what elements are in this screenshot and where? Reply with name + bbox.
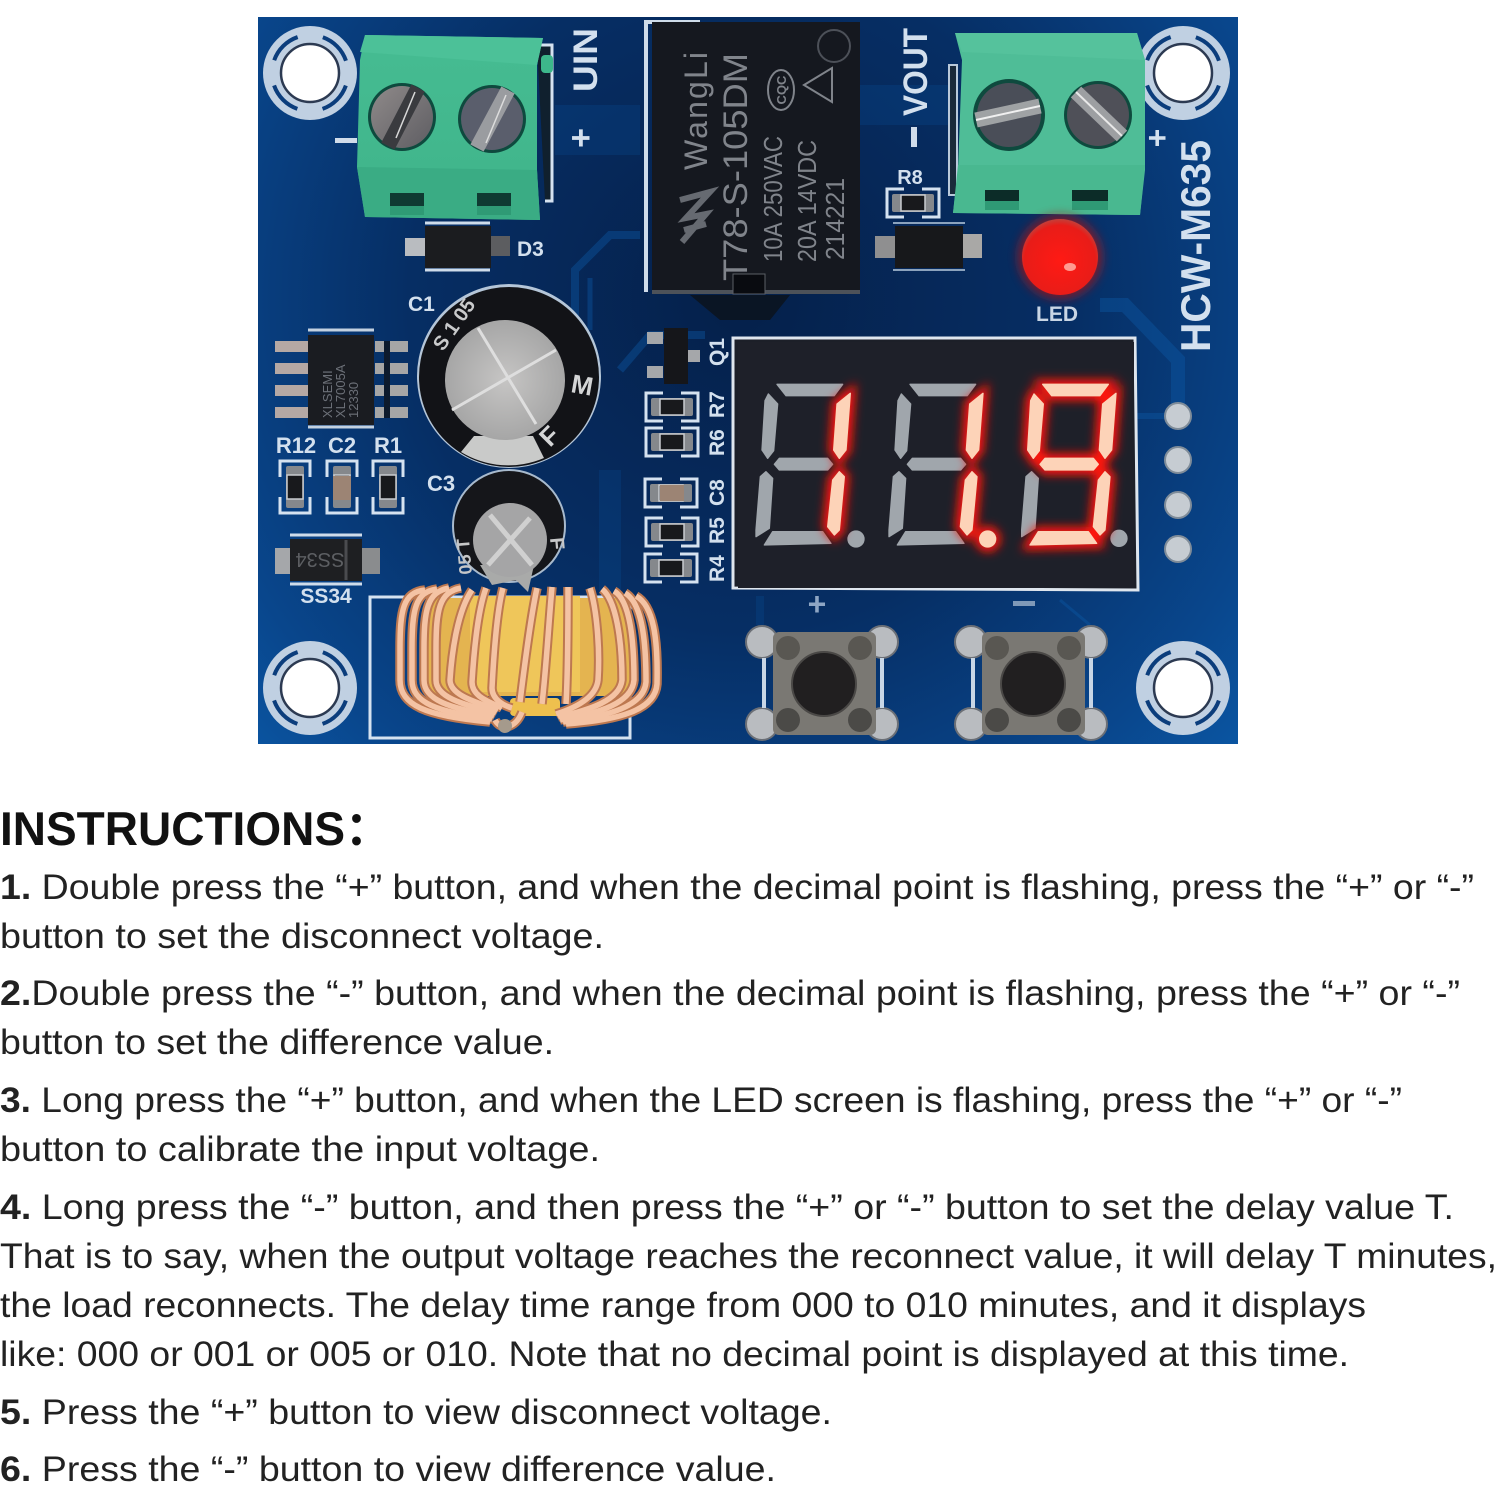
labels: Q1 R7 R6 C8 R5 R4: R5: [706, 517, 729, 544]
dim segments, second digit: [889, 384, 976, 545]
resistors R12 C2 R1: [280, 461, 403, 513]
relay: 10A 250VAC: [758, 136, 788, 262]
step 3: 3. Long press the “+” button, and when the LED screen is flashing, press the “+” or “-”: [0, 1081, 1402, 1120]
relay: CQC: [774, 75, 789, 104]
labels: R12 C2 R1: R12: [276, 433, 316, 458]
lit segments glow: [828, 384, 1116, 547]
step 5: 5. Press the “+” button to view disconnect voltage.: [0, 1393, 832, 1432]
label: D3: D3: [517, 238, 544, 261]
chip: [275, 330, 408, 427]
resistors R7 R6 C8 R5 R4: [645, 393, 698, 582]
labels: Q1 R7 R6 C8 R5 R4: R7: [706, 391, 729, 418]
diode D3: [405, 223, 510, 270]
inductor outline: [370, 597, 630, 738]
lit segments: [828, 384, 1116, 547]
diode right: [875, 223, 982, 270]
dim segments, third digit: [1022, 472, 1127, 546]
step 4: 4. Long press the “-” button, and then press the “+” or “-” button to set the delay value T.: [0, 1188, 1454, 1227]
label: LED: LED: [1036, 303, 1078, 326]
label: minus right: [911, 127, 917, 147]
output terminal block: [949, 33, 1145, 215]
step 2: button to set the difference value.: [0, 1023, 554, 1062]
instructions text: [0, 868, 1497, 1489]
push button minus: [955, 626, 1107, 740]
capacitor C1: [417, 284, 601, 468]
label: plus: +: [562, 128, 600, 148]
relay: T78-S-105DM: [717, 53, 755, 281]
label: HCW-M635: HCW-M635: [1172, 140, 1219, 352]
mounting hole bottom right: [1136, 641, 1230, 735]
labels: Q1 R7 R6 C8 R5 R4: C8: [706, 479, 729, 506]
step 3: button to calibrate the input voltage.: [0, 1130, 600, 1169]
relay: 20A 14VDC: [792, 140, 822, 262]
mounting hole bottom left: [263, 641, 357, 735]
relay: [646, 22, 860, 320]
capacitor C3: [453, 470, 568, 592]
LED: [1018, 215, 1102, 299]
capacitor C1: S 1 05: [429, 295, 480, 355]
step 4: [0, 1188, 1497, 1374]
labels: Q1 R7 R6 C8 R5 R4: [706, 338, 729, 582]
step 2: [0, 974, 1460, 1062]
resistor R8: [887, 189, 939, 217]
step 2: 2.Double press the “-” button, and when the decimal point is flashing, press the “+” or “-”: [0, 974, 1460, 1013]
label: minus: [335, 138, 357, 143]
label: SS34: SS34: [300, 585, 352, 608]
capacitor C1: M: [569, 368, 596, 402]
board background: [258, 17, 1238, 744]
mounting hole top right: [1136, 26, 1230, 120]
label: C3: C3: [427, 471, 455, 496]
transistor Q1: [647, 328, 700, 384]
label: plus right: +: [1139, 129, 1175, 147]
diode SS34: SS34: [296, 548, 344, 570]
labels: R12 C2 R1: R1: [374, 433, 402, 458]
LED display: [733, 338, 1138, 590]
label: UIN: UIN: [567, 28, 605, 92]
label: R8: R8: [897, 167, 923, 189]
relay: WangLi: [678, 52, 714, 170]
capacitor C1: F: [533, 420, 565, 452]
chip: XLSEMI: [320, 370, 335, 418]
label: plus button: +: [808, 586, 826, 622]
step 1: [0, 868, 1474, 956]
step 6: 6. Press the “-” button to view difference value.: [0, 1450, 776, 1489]
mounting hole top left: [263, 26, 357, 120]
toroid inductor: [400, 587, 657, 733]
chip: 12330: [346, 382, 361, 418]
copper traces: [555, 105, 1178, 625]
label: minus button: [1013, 601, 1035, 606]
label: C1: C1: [408, 293, 435, 316]
step 4: That is to say, when the output voltage reaches the reconnect value, it will delay T minutes,: [0, 1237, 1497, 1276]
header pins: [1165, 403, 1191, 562]
capacitor C3: F: [545, 537, 568, 551]
panel: circuit board photo: [258, 17, 1238, 744]
step 4: the load reconnects. The delay time range from 000 to 010 minutes, and it displays: [0, 1286, 1366, 1325]
dim segments, first digit: [756, 384, 864, 547]
labels: R12 C2 R1: C2: [328, 433, 356, 458]
step 4: like: 000 or 001 or 005 or 010. Note that no decimal point is displayed at this time.: [0, 1335, 1349, 1374]
chip: XL7005A: [333, 364, 348, 418]
input terminal block: [357, 35, 553, 220]
step 1: 1. Double press the “+” button, and when the decimal point is flashing, press the “+” or “-”: [0, 868, 1474, 907]
labels: Q1 R7 R6 C8 R5 R4: R4: [706, 555, 729, 582]
push button plus: [746, 626, 898, 740]
step 3: [0, 1081, 1402, 1169]
relay: 214221: [820, 178, 850, 260]
capacitor C3: 05 T: [453, 538, 476, 575]
step 1: button to set the disconnect voltage.: [0, 917, 604, 956]
diode SS34: [275, 535, 380, 584]
labels: Q1 R7 R6 C8 R5 R4: R6: [706, 429, 729, 456]
label: VOUT: VOUT: [897, 28, 935, 116]
heading: INSTRUCTIONS：: [0, 802, 391, 855]
labels: R12 C2 R1: [276, 433, 402, 458]
labels: Q1 R7 R6 C8 R5 R4: Q1: [706, 338, 729, 366]
